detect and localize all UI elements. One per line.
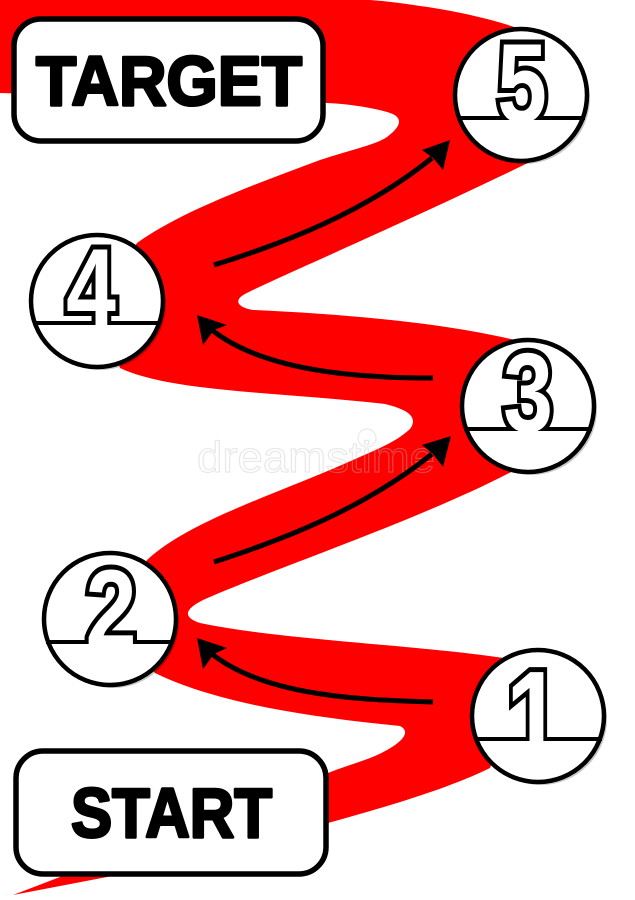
step 3 circle (462, 331, 597, 475)
arrow: step 3 to 4 (197, 315, 433, 378)
arrow: step 1 to 2 (197, 638, 433, 702)
start label box: START (71, 774, 272, 852)
step 3 circle: 3 (503, 331, 553, 455)
arrow: step 4 to 5 (214, 140, 450, 265)
step 4 circle: 4 (66, 227, 116, 351)
step 1 circle (472, 644, 607, 794)
step 4 circle (31, 227, 166, 370)
step 2 circle (44, 546, 179, 688)
step 2 circle: 2 (85, 546, 137, 672)
start label box (16, 751, 326, 874)
step 1 circle: 1 (506, 644, 562, 794)
watermark: dreamstime (197, 433, 435, 482)
arrow: step 2 to 3 (214, 436, 451, 562)
step 5 circle (455, 22, 590, 164)
target label box (14, 19, 323, 141)
target label box: TARGET (36, 42, 302, 120)
step 5 circle: 5 (497, 22, 547, 146)
